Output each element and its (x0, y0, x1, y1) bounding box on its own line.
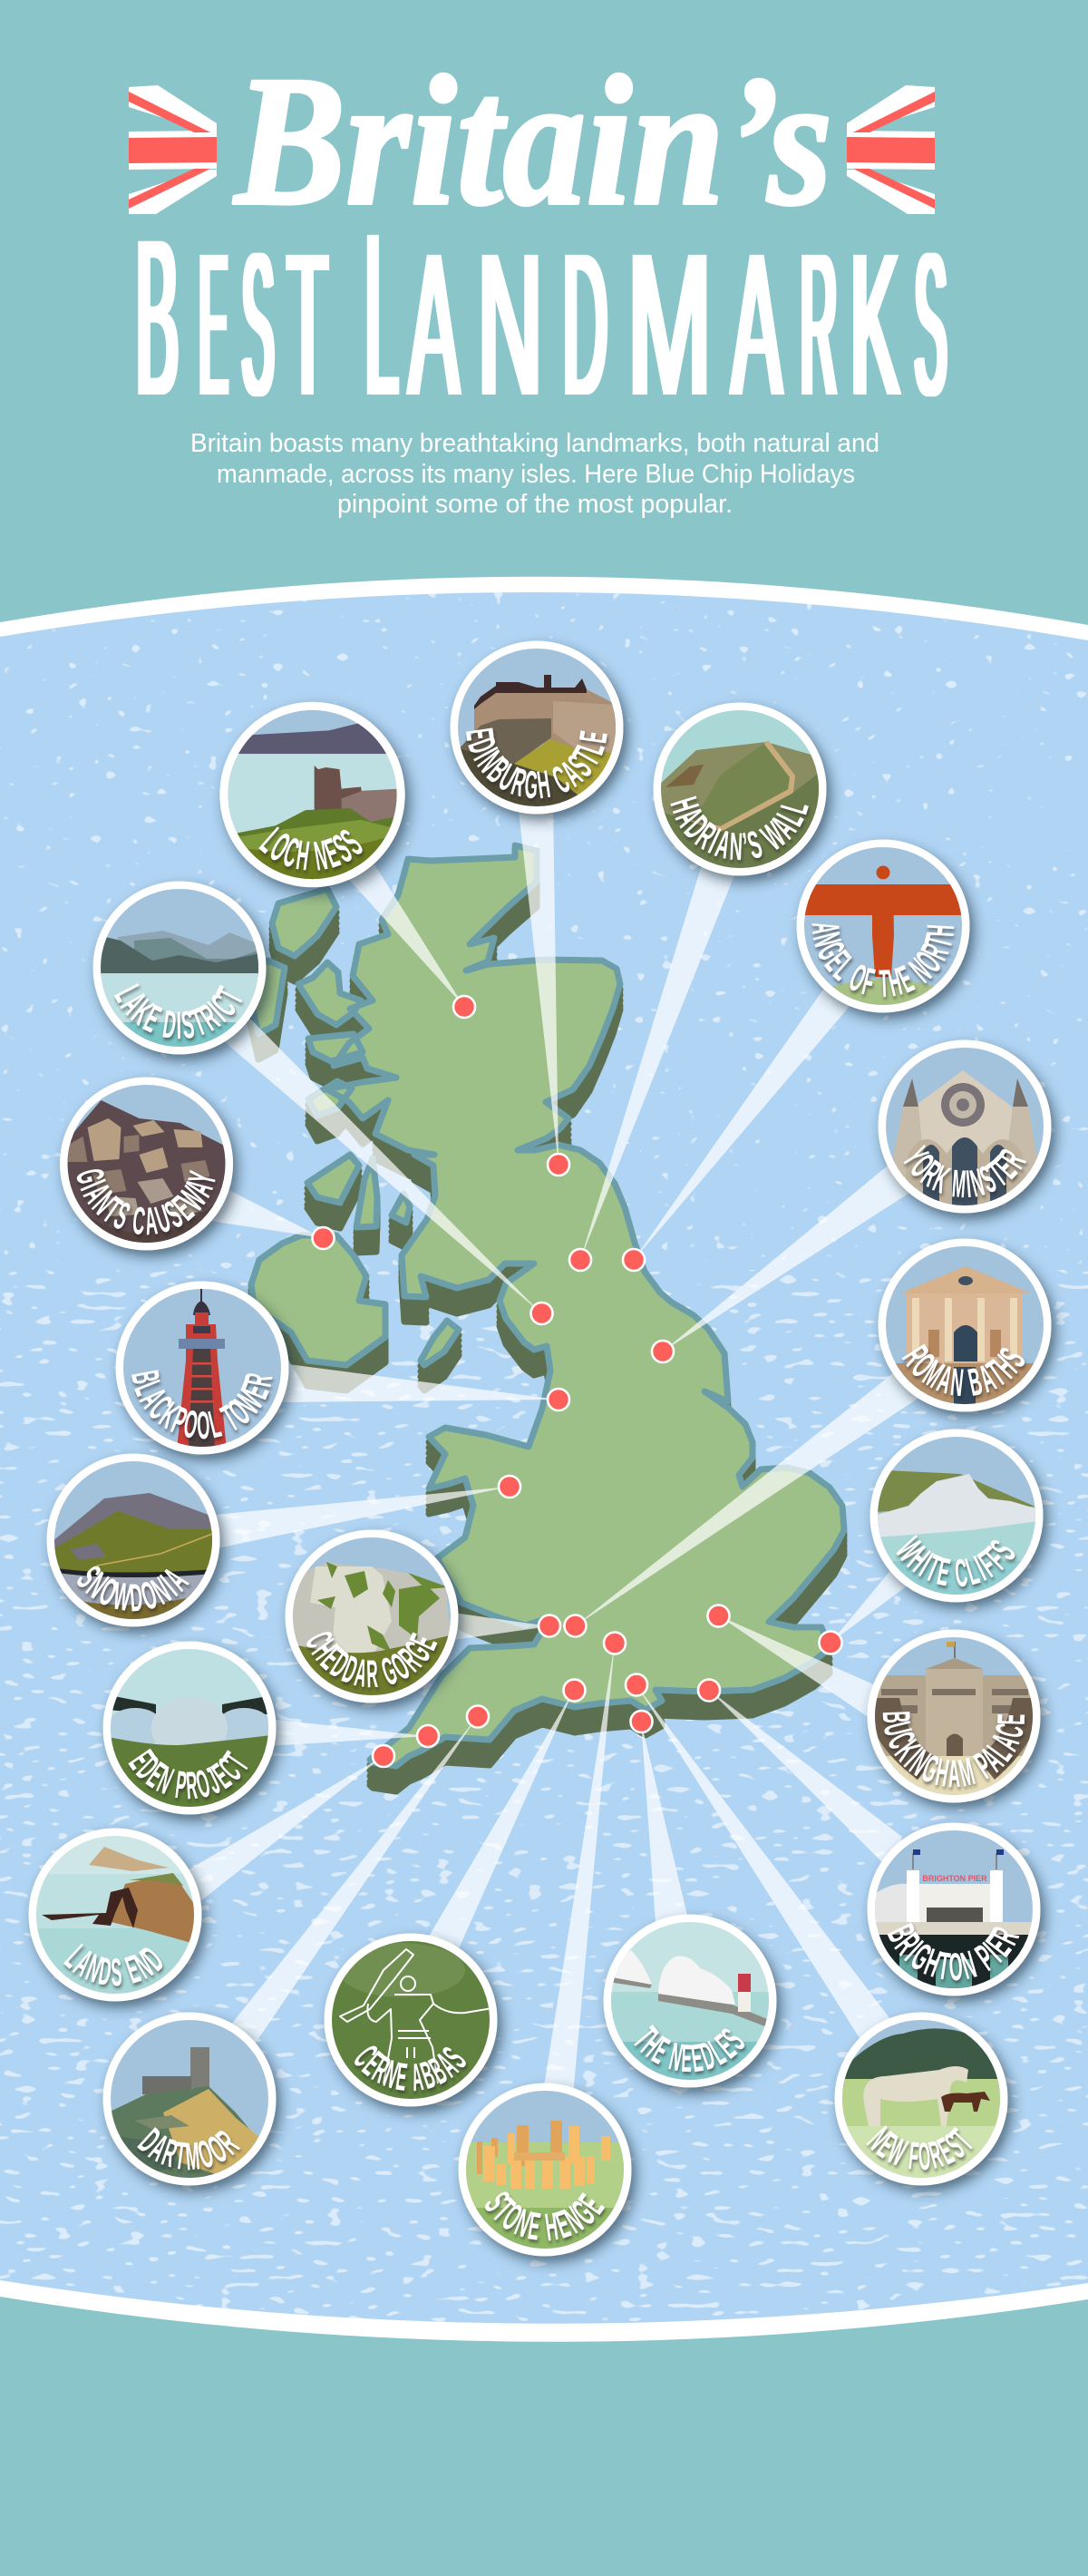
badge: Giants Causeway: GIANTS CAUSEWAY (76, 1169, 217, 1238)
badge: Stone Henge: STONE HENGE (484, 2191, 607, 2245)
text: S (915, 211, 947, 438)
title: Best Landmarks: N (478, 211, 542, 438)
badge: New Forest (830, 2009, 1022, 2201)
intro paragraph: manmade, across its many isles. Here Blue Chip Holidays (217, 460, 855, 489)
icon: right union jack flag (847, 85, 935, 214)
light beams linking pins to landmark badges (186, 803, 920, 2095)
badge: Brighton Pier (862, 1820, 1054, 2012)
badge: Eden Project (98, 1638, 290, 1830)
badge: Loch Ness: LOCH NESS (258, 826, 364, 874)
title: Best Landmarks: M (627, 211, 712, 438)
title block (129, 38, 947, 519)
badge: White Cliffs (865, 1426, 1057, 1618)
badge: Brighton Pier: BRIGHTON PIER (922, 1874, 987, 1883)
badge: Blackpool Tower (111, 1278, 303, 1470)
badge: The Needles: THE NEEDLES (634, 2025, 747, 2077)
badge: York Minster (873, 1037, 1065, 1229)
badge: Cheddar Gorge (280, 1527, 471, 1719)
title: Best Landmarks: R (801, 211, 837, 438)
badge: Lake District: LAKE DISTRICT (114, 983, 245, 1043)
badge: Blackpool Tower: BLACKPOOL TOWER (131, 1370, 275, 1442)
badge: Giants Causeway (54, 1074, 247, 1266)
title: Best Landmarks: E (199, 211, 228, 438)
badge: Hadrian's Wall: HADRIAN’S WALL (670, 796, 811, 864)
badge: Roman Baths (873, 1235, 1065, 1428)
title: Best Landmarks: B (136, 193, 179, 443)
badge: Stone Henge (453, 2080, 646, 2272)
title: Best Landmarks: K (850, 211, 899, 438)
title: Best Landmarks: A (409, 211, 459, 438)
map pins (312, 996, 841, 1767)
badge: Snowdonia: SNOWDONIA (76, 1566, 191, 1615)
badge: Cheddar Gorge: CHEDDAR GORGE (306, 1632, 439, 1691)
map of Britain with extruded coast (245, 845, 844, 1791)
badge: Lands End (24, 1825, 216, 2017)
badge: Buckingham Palace: BUCKINGHAM PALACE (882, 1712, 1026, 1791)
title: Best Landmarks: L (365, 185, 398, 444)
badge: Lake District (88, 878, 279, 1070)
intro paragraph: pinpoint some of the most popular. (337, 490, 733, 519)
sea panel with white curved edges (0, 577, 1088, 2349)
title: Britain's: Britain’s (233, 38, 832, 244)
badge: Angel of the North: ANGEL OF THE NORTH (811, 923, 957, 1001)
badge: Edinburgh Castle (445, 638, 637, 830)
title: Best Landmarks: T (287, 211, 326, 438)
intro paragraph: Britain boasts many breathtaking landmarks, both natural and (190, 429, 879, 458)
badge: Snowdonia (42, 1450, 234, 1643)
title: Best Landmarks: A (732, 211, 782, 438)
badge: Cerne Abbas (319, 1930, 511, 2122)
badge: New Forest: NEW FOREST (866, 2125, 975, 2175)
badge: The Needles (598, 1911, 791, 2103)
badge: Eden Project: EDEN PROJECT (128, 1749, 250, 1803)
badge: Cerne Abbas: CERNE ABBAS (354, 2046, 468, 2095)
badge: Brighton Pier: BRIGHTON PIER (887, 1923, 1019, 1985)
badge: Loch Ness (214, 698, 421, 903)
badge: Dartmoor: DARTMOOR (137, 2127, 243, 2173)
badge: Roman Baths: ROMAN BATHS (901, 1344, 1027, 1400)
badge: York Minster: YORK MINSTER (903, 1145, 1028, 1201)
title: Best Landmarks: D (563, 211, 607, 438)
badge: Edinburgh Castle: EDINBURGH CASTLE (465, 727, 609, 802)
title: Best Landmarks: S (242, 211, 274, 438)
badge: Dartmoor (98, 2009, 290, 2201)
intro paragraph (190, 429, 879, 519)
badge: White Cliffs: WHITE CLIFFS (896, 1535, 1017, 1591)
badge: Angel of the North (792, 836, 984, 1029)
badge: Buckingham Palace (862, 1626, 1054, 1819)
badge: Lands End: LANDS END (63, 1944, 165, 1990)
badge: Hadrian's Wall (648, 699, 840, 892)
icon: left union jack flag (129, 85, 217, 214)
